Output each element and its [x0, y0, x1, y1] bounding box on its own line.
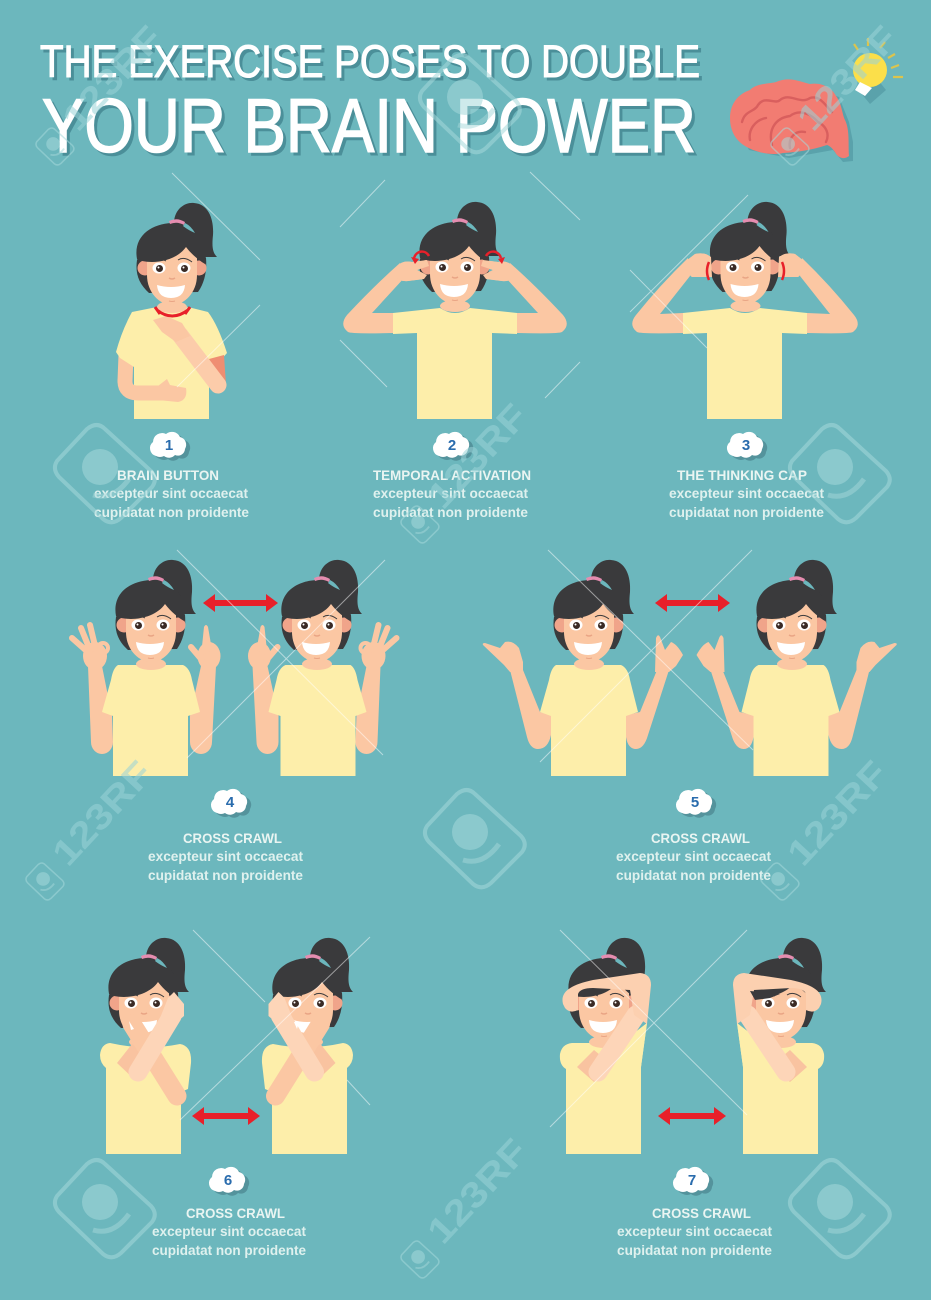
figure 6: left and right	[100, 938, 353, 1154]
caption 4: CROSS CRAWL	[183, 830, 282, 846]
caption 6: excepteur sint occaecat	[152, 1223, 306, 1239]
caption 4: excepteur sint occaecat	[148, 848, 303, 864]
caption 7: excepteur sint occaecat	[617, 1223, 772, 1239]
figure 5: left and right	[483, 560, 897, 776]
title: THE EXERCISE POSES TO DOUBLE	[43, 39, 703, 90]
right pose (mirrored)	[696, 635, 897, 776]
caption 5: excepteur sint occaecat	[616, 848, 771, 864]
right pose	[262, 1043, 353, 1154]
watermark: 123RF	[54, 18, 170, 138]
crossing arm	[598, 1015, 636, 1072]
watermark: 123RF	[419, 396, 535, 516]
caption 2	[373, 432, 531, 520]
thumb hand right	[655, 635, 683, 672]
arm across forehead	[562, 973, 651, 1024]
caption 6	[152, 1167, 306, 1258]
hand on chest	[153, 316, 190, 342]
caption 3: 3	[742, 437, 750, 454]
red arc neck	[155, 307, 190, 316]
figure 2: temporal activation	[343, 202, 567, 419]
icon: brain with light bulb	[730, 38, 903, 162]
title: THE EXERCISE POSES TO DOUBLE	[40, 36, 700, 87]
shirt	[116, 307, 227, 419]
caption 4	[148, 789, 303, 883]
caption 2: excepteur sint occaecat	[373, 485, 528, 501]
caption 4: cupidatat non proidente	[148, 867, 303, 883]
caption 1: 1	[165, 437, 173, 454]
arrow	[658, 1107, 726, 1125]
watermark: 123RF	[419, 1131, 535, 1251]
caption 1: cupidatat non proidente	[94, 504, 249, 520]
right pose (mirrored)	[248, 625, 396, 776]
hands over ears	[686, 253, 712, 277]
caption 6: cupidatat non proidente	[152, 1242, 306, 1258]
caption 5: 5	[691, 794, 699, 811]
caption 1: BRAIN BUTTON	[117, 467, 219, 483]
watermark: 123RF	[789, 18, 905, 138]
head	[136, 203, 217, 313]
teeth slivers	[129, 1021, 299, 1030]
caption 5	[616, 789, 771, 883]
forearm	[180, 335, 218, 385]
right pose	[737, 1023, 824, 1154]
left pose	[100, 1043, 191, 1154]
figure 3: the thinking cap	[632, 202, 858, 419]
caption 7: cupidatat non proidente	[617, 1242, 772, 1258]
caption 4: 4	[226, 794, 235, 811]
red rotation arrows	[414, 252, 501, 258]
pointing hand	[198, 642, 220, 670]
caption 1	[94, 432, 249, 520]
arrow	[192, 1107, 260, 1125]
left pose	[483, 635, 683, 776]
figure 1: brain button	[116, 203, 227, 419]
caption 2: TEMPORAL ACTIVATION	[373, 467, 531, 483]
title	[40, 36, 703, 172]
caption 5: cupidatat non proidente	[616, 867, 771, 883]
caption 7: 7	[688, 1172, 696, 1189]
fringe peeking under raised arm	[750, 991, 780, 1000]
lower hand	[158, 379, 186, 402]
lower forearm over shirt	[125, 381, 168, 393]
caption 5: CROSS CRAWL	[651, 830, 750, 846]
raised sleeve	[620, 1023, 647, 1070]
figure 7: left and right	[560, 938, 826, 1154]
caption 6: CROSS CRAWL	[186, 1205, 285, 1221]
arrow	[655, 594, 730, 612]
title: YOUR BRAIN POWER	[45, 87, 699, 172]
title: YOUR BRAIN POWER	[42, 84, 696, 169]
thumb hand left	[483, 642, 523, 672]
caption 3: THE THINKING CAP	[677, 467, 807, 483]
sleeve shadow	[209, 355, 226, 385]
OK hand	[83, 642, 107, 670]
caption 3: excepteur sint occaecat	[669, 485, 824, 501]
caption 2: 2	[448, 437, 456, 454]
caption 2: cupidatat non proidente	[373, 504, 528, 520]
caption 7: CROSS CRAWL	[652, 1205, 751, 1221]
left pose	[560, 1023, 647, 1154]
left upper arm behind shirt	[125, 355, 126, 381]
figure 4: left and right	[72, 560, 396, 776]
left pose	[72, 625, 220, 776]
hands at ears	[395, 260, 429, 281]
red rotation arrows	[707, 262, 784, 280]
caption 3	[669, 432, 824, 520]
caption 6: 6	[224, 1172, 232, 1189]
watermark: 123RF	[44, 753, 160, 873]
caption 1: excepteur sint occaecat	[94, 485, 248, 501]
caption 3: cupidatat non proidente	[669, 504, 824, 520]
watermark: 123RF	[779, 753, 895, 873]
arrow	[203, 594, 278, 612]
caption 7	[617, 1167, 772, 1258]
